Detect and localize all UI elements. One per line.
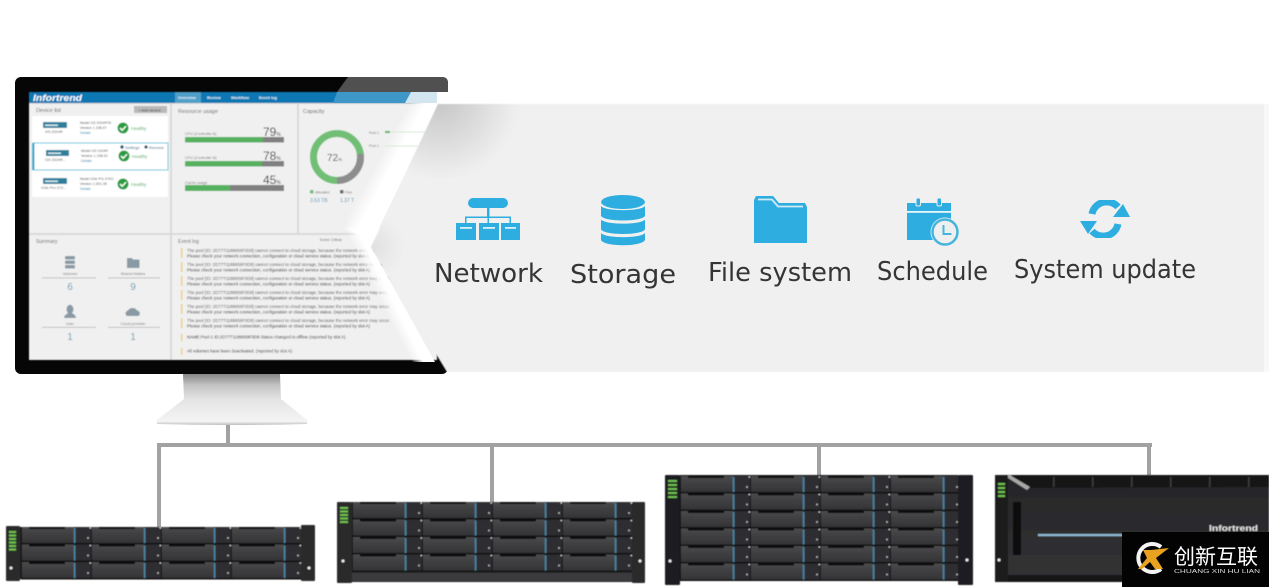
status LEDs [9,531,16,550]
top navigation bar: Workflow [231,95,250,100]
panel: capacity: Pool 1 [369,144,379,148]
icon: storage [601,195,645,245]
watermark pinyin: CHUANG XIN HU LIAN [1174,569,1260,575]
panel: resource usage: Cache usage [185,181,207,185]
icon: network [456,198,520,240]
panel: summary: 6 [67,282,73,293]
icon: logo mark [1138,544,1169,572]
icon: volumes [65,256,75,268]
device row 1: Details [80,131,91,135]
panel: event log: Event log [178,239,199,245]
device row 3: GSe Pro 370... [41,186,66,190]
device row 1: Model GS 2024RTB [80,121,112,125]
donut chart: 72% [327,153,342,164]
panel: event log: NAME:Pool-1 ID:2D77T1189959F0D8 Status changed to offline (reported by slot A) [187,334,346,340]
panel: event log: Please check your network connection, configuration or cloud service status. (reported by slot A) [187,296,371,300]
dashboard screen [29,92,437,360]
panel: device list: Device list [36,108,62,114]
panel: event log: All volumes have been deactivated. (reported by slot A) [187,348,293,354]
panel: capacity: Capacity [303,109,325,115]
label: schedule: Schedule [877,257,988,287]
panel: event log: Please check your network connection, configuration or cloud service status. (reported by slot A) [187,254,371,258]
panel: capacity: Pool 1 [369,131,379,135]
device row 1: GS 2024R [45,130,63,134]
feature panel background [360,100,1269,380]
panel: summary: User [66,322,75,326]
panel: resource usage: 45% [263,173,281,187]
device row 3: Healthy [131,182,147,187]
status LEDs [340,507,348,523]
panel: event log: The pool [ID: 2D77T1189959F0D8] cannot connect to cloud storage, because the network error may occur. [187,318,390,323]
panel: resource usage: CPU (Controller A) [185,132,217,136]
panel: device list: + Add device [138,108,162,112]
panel: resource usage [172,104,297,233]
icon: schedule [907,198,960,246]
device row 1: Version 1.10B.07 [80,126,107,130]
brand text: Infortrend [1209,524,1258,533]
storage server 1 [6,525,315,581]
top navigation bar [29,92,437,104]
white gap beside the bezel [437,92,449,105]
label: system update: System update [1014,255,1196,285]
panel: resource usage: CPU (Controller B) [185,156,217,160]
panel: summary: Shared folders [121,272,145,276]
panel: resource usage: Resource usage [178,109,218,115]
panel: summary: 9 [130,282,136,293]
panel: event log: The pool [ID: 2D77T1189959F0D8] cannot connect to cloud storage, because the network error may occur. [187,304,390,309]
panel: capacity: Free [345,190,352,194]
icon: shared folders [127,258,140,268]
panel: event log: Please check your network connection, configuration or cloud service status. (reported by slot A) [187,282,371,286]
panel: features [360,100,1269,380]
device row 2 [45,145,165,163]
panel: summary: Volumes [63,272,77,276]
icon: user [64,305,76,318]
top navigation bar: Overview [178,95,197,100]
monitor stand [157,374,307,425]
device row 2: Remove [149,145,165,150]
pool capacity lines [385,132,427,146]
panel: summary [29,235,170,360]
panel: summary: Cloud provider [121,322,146,326]
top navigation bar: Review [207,95,222,100]
device row 2: Details [81,159,92,163]
device row 3: Details [80,187,91,191]
panel: event log: The pool [ID: 2D77T1189959F0D8] cannot connect to cloud storage, because the network error may occur. [187,262,390,267]
panel: event log: Please check your network connection, configuration or cloud service status. (reported by slot A) [187,268,371,272]
white chevron band: upper [342,103,440,240]
panel: resource usage: 78% [263,149,281,163]
white chevron band: lower [342,228,435,362]
icon: system update [1080,202,1130,236]
panel: event log [172,235,437,360]
device row 3 [41,177,147,191]
icon: cloud [126,308,140,316]
watermark name: 创新互联 [1174,546,1258,569]
device row 2: Version 1.10B.02 [81,154,108,158]
device row 2: Healthy [132,154,148,159]
device row 3: Model GSe Pro 370G [80,177,114,181]
panel: event log: The pool [ID: 2D77T1189959F0D8] cannot connect to cloud storage, because the network error may occur. [187,276,390,281]
label: network: Network [434,259,543,289]
device row 1 [43,121,147,135]
top navigation bar: Infortrend [33,93,82,104]
right edge strip [1264,104,1269,372]
storage server 2 [337,502,645,583]
watermark logo [1122,532,1269,587]
status LEDs [998,483,1005,497]
panel: capacity [299,104,437,233]
monitor [15,77,448,374]
panel: summary: 1 [130,332,136,343]
device row 2: Settings [125,145,139,150]
panel: resource usage: 79% [263,125,281,139]
panel: summary: Summary [36,239,58,245]
panel: event log: Please check your network connection, configuration or cloud service status. (reported by slot A) [187,324,371,328]
panel: event log: The pool [ID: 2D77T1189959F0D8] cannot connect to cloud storage, because the network error may occur. [187,248,390,253]
device row 3: Version 1.00C.05 [80,182,107,186]
top navigation bar: Event log [259,95,278,100]
label: file system: File system [708,258,852,288]
panel: capacity: Allocated [315,190,329,194]
panel: device list [29,104,170,233]
nav bar pale end [405,92,437,103]
storage server 3 [665,475,973,585]
panel: event log: The pool [ID: 2D77T1189959F0D8] cannot connect to cloud storage, because the network error may occur. [187,290,390,295]
bezel reflection [337,77,448,92]
storage server 4 [995,474,1269,582]
device row 2: Model GS 1016R [81,149,108,153]
panel: capacity: 1.37 T [340,198,354,204]
nav bar reflection [333,92,437,103]
device row 1: Healthy [131,126,147,131]
panel: capacity: 3.53 TB [310,198,328,204]
icon: folder [754,196,807,243]
panel: event log: Please check your network connection, configuration or cloud service status. (reported by slot A) [187,310,371,314]
panel: summary: 1 [67,332,73,343]
device row 2: GS 3324R... [45,158,66,162]
blue light bar [1038,534,1128,536]
status LEDs [668,480,677,498]
label: storage: Storage [570,260,676,290]
connection lines [157,424,1152,527]
panel: event log: Event: Critical [320,238,342,242]
monitor bezel [15,77,448,374]
